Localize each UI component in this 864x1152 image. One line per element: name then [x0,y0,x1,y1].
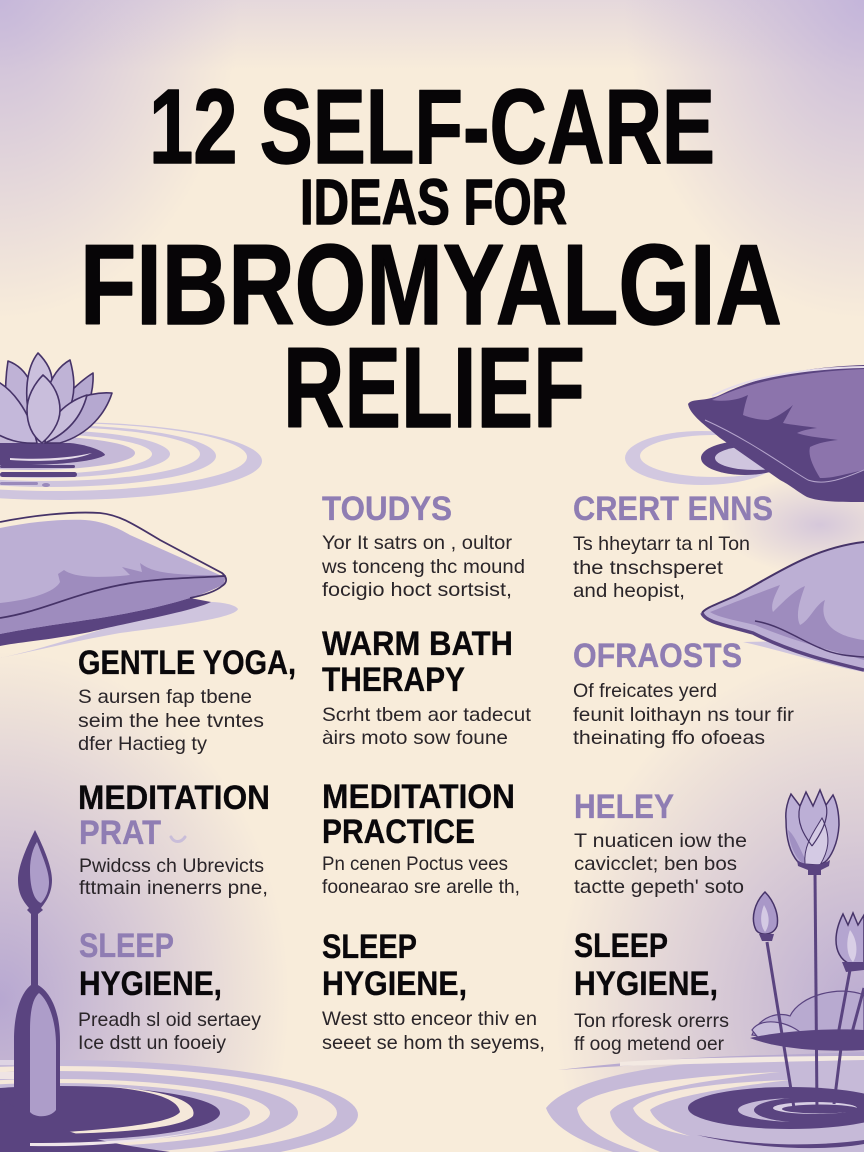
item: sleep hygiene column two [322,928,545,1054]
item: crert enns: Ts hheytarr ta nl Ton [573,533,750,555]
item: ofraosts [573,637,795,749]
item: sleep hygiene column three [574,927,729,1055]
item: meditation practice: foonearao sre arelle th, [322,876,520,898]
item: gentle yoga: seim the hee tvntes [78,710,264,732]
item: warm bath therapy: Scrht tbem aor tadecut [322,704,532,726]
item: sleep hygiene column two: SLEEP [322,928,417,966]
item: meditation prat [78,779,270,899]
item: heley: HELEY [574,788,674,826]
item: crert enns: CRERT ENNS [573,490,773,528]
title: RELIEF [283,325,585,452]
item: gentle yoga [78,644,296,755]
item: ofraosts: OFRAOSTS [573,637,742,675]
item: meditation practice: PRACTICE [322,813,475,851]
item: crert enns: and heopist, [573,580,685,602]
item: toudys: TOUDYS [322,490,452,528]
item: sleep hygiene column one: SLEEP [79,927,174,965]
item: heley: T nuaticen iow the [574,830,747,852]
item: gentle yoga: S aursen fap tbene [78,686,252,708]
item: sleep hygiene column three: ff oog metend oer [574,1033,724,1055]
item: ofraosts: theinating ffo ofoeas [573,727,765,749]
item: sleep hygiene column one: Preadh sl oid sertaey [78,1009,261,1031]
illustration: light pillow middle right [702,542,864,672]
item: sleep hygiene column three: SLEEP [574,927,668,965]
item: crert enns [573,490,773,602]
item: heley [574,788,747,898]
item: sleep hygiene column three: Ton rforesk orerrs [574,1010,729,1032]
item: gentle yoga: dfer Hactieg ty [78,733,207,755]
item: toudys [321,490,525,601]
item: crert enns: the tnschsperet [573,557,724,579]
item: gentle yoga: GENTLE YOGA, [78,644,296,682]
item: heley: cavicclet; ben bos [574,853,737,875]
item: sleep hygiene column one: HYGIENE, [79,965,222,1003]
item: heley: tactte gepeth' soto [574,876,744,898]
item: meditation practice: Pn cenen Poctus vees [322,853,508,875]
item: meditation practice [322,778,520,898]
item: warm bath therapy: WARM BATH [322,625,513,663]
illustration: ripples and lavender vase bottom left [0,830,358,1152]
item: meditation prat: Pwidcss ch Ubrevicts [79,855,264,877]
item: sleep hygiene column three: HYGIENE, [574,965,718,1003]
title [80,68,782,452]
illustration: lavender pillow left [0,513,238,658]
illustration: lotus on rippled water [0,353,262,500]
illustration: lotus buds and ripples bottom right [546,790,864,1152]
item: sleep hygiene column one: Ice dstt un fooeiy [78,1032,226,1054]
item: warm bath therapy: àirs moto sow foune [322,727,508,749]
item: meditation prat: PRAT [79,814,161,852]
title: IDEAS FOR [300,166,567,238]
item: sleep hygiene column two: seeet se hom th seyems, [322,1032,545,1054]
illustration: dark purple pillow top right [625,365,864,502]
item: meditation prat: fttmain inenerrs pne, [79,877,268,899]
item: ofraosts: Of freicates yerd [573,680,717,702]
item: meditation practice: MEDITATION [322,778,515,816]
item: toudys: Yor It satrs on , oultor [322,532,513,554]
item: sleep hygiene column one [78,927,261,1054]
item: sleep hygiene column two: West stto enceor thiv en [322,1008,537,1030]
item: toudys: ws tonceng thc mound [321,556,525,578]
item: warm bath therapy: THERAPY [322,661,465,699]
item: toudys: focigio hoct sortsist, [322,579,512,601]
item: ofraosts: feunit loithayn ns tour fir [573,704,795,726]
item: sleep hygiene column two: HYGIENE, [322,965,467,1003]
item: warm bath therapy [322,625,532,749]
item: meditation prat: MEDITATION [78,779,270,817]
